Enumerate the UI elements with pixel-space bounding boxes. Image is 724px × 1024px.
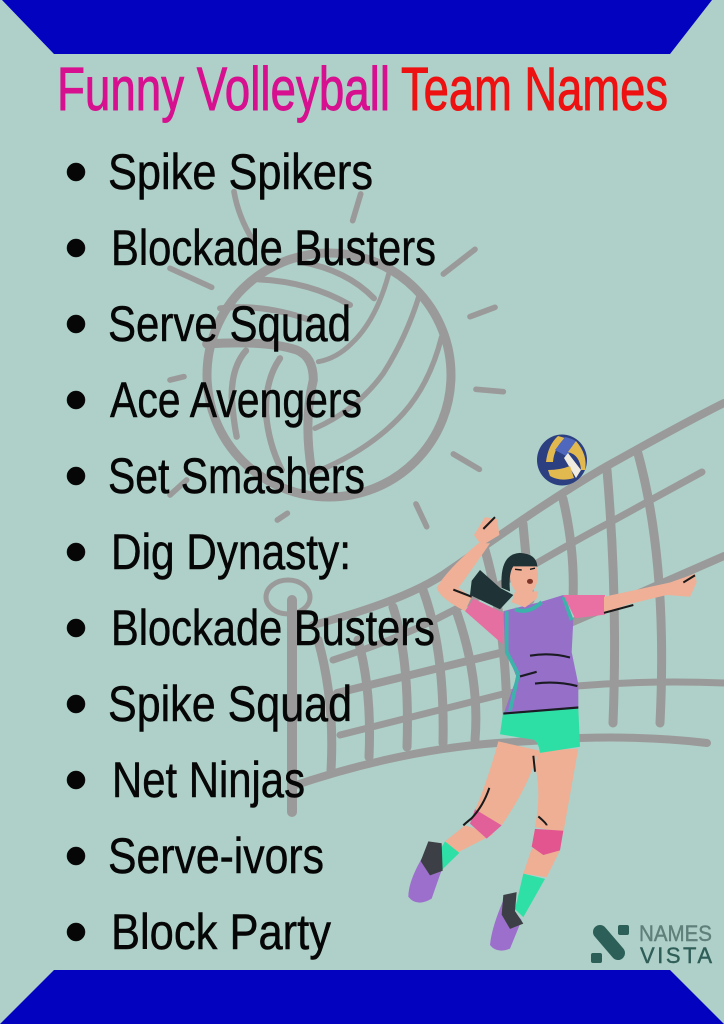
bullet item: Net Ninjas: Net Ninjas [112,752,305,808]
background illustration: volleyball net [266,403,724,812]
bullet item: Block Party: Block Party [111,904,331,960]
top blue banner [2,0,712,54]
volleyball in the air [537,434,587,486]
logo: Names Vista [591,921,712,968]
bullet item: Serve Squad: Serve Squad [108,296,351,352]
bullet item: Serve-ivors: Serve-ivors [108,828,324,884]
arms and hands [437,517,697,613]
bullet item: Blockade Busters: Blockade Busters [111,600,435,656]
bullet item: Dig Dynasty: Dig Dynasty: [111,524,351,580]
background illustration: volleyball sketch [170,192,503,527]
logo wordmark [639,921,712,968]
bullet item: Spike Spikers: Spike Spikers [108,144,373,200]
jersey [465,595,605,715]
volleyball player illustration [408,517,697,951]
bullet item: Spike Squad: Spike Squad [108,676,352,732]
net ropes [293,403,724,786]
bullet item: Blockade Busters: Blockade Busters [111,220,436,276]
shorts [500,709,580,753]
team names list [67,144,436,960]
back leg [408,741,538,903]
logo mark [591,925,629,963]
net pole and ring [266,580,310,812]
title: Funny Volleyball [57,55,390,123]
bullet item: Ace Avengers: Ace Avengers [110,372,362,428]
front leg [490,749,578,951]
net vertical cords [318,450,662,770]
logo wordmark: VISTA [640,943,712,968]
logo wordmark: NAMES [639,921,712,946]
bullet item: Set Smashers: Set Smashers [108,448,365,504]
head and hair [470,553,538,609]
bottom blue banner [0,970,724,1024]
